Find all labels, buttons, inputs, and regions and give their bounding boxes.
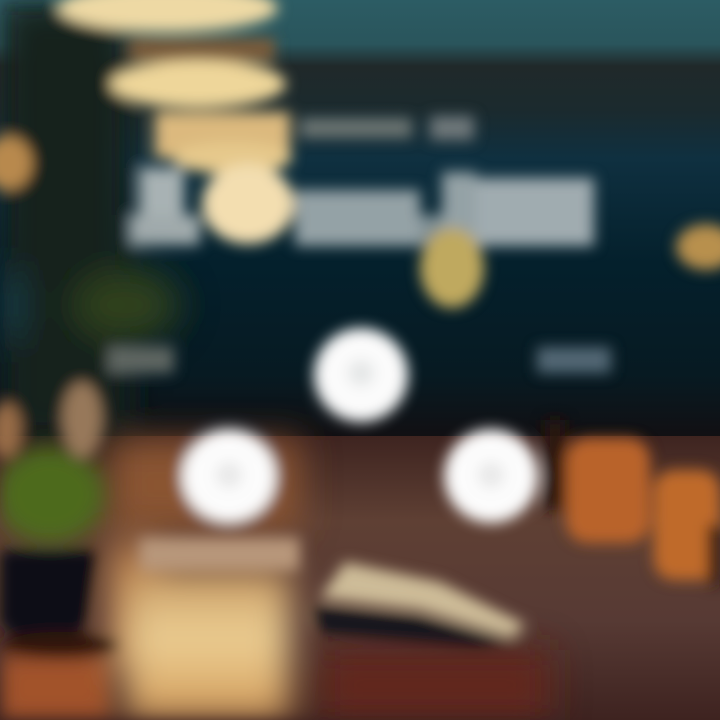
orange chairs — [545, 420, 720, 585]
potted plant foliage — [0, 382, 105, 543]
title heading: small line — [300, 116, 474, 140]
background: wooden table — [0, 436, 720, 720]
right wall lamp — [676, 224, 720, 270]
plant pot shadow — [0, 632, 120, 658]
right stat label — [537, 347, 611, 373]
light band on table — [140, 538, 300, 570]
plant pot — [0, 550, 100, 641]
title heading: large line — [130, 168, 594, 246]
dark left wall — [0, 0, 130, 440]
table light reflection — [125, 570, 290, 720]
background: night window — [0, 0, 720, 440]
green plant in window — [70, 267, 180, 343]
blue patch at left edge — [0, 270, 24, 340]
white circle top — [314, 328, 408, 422]
white circle right — [444, 429, 538, 523]
book on table — [310, 562, 525, 648]
title glow from lamp — [202, 164, 294, 244]
table tones — [0, 440, 550, 720]
left wall lamp — [0, 136, 32, 190]
gold medallion — [420, 228, 484, 308]
pendant lamp stack — [58, 0, 292, 174]
left stat label — [108, 347, 174, 373]
white circle left — [182, 429, 276, 523]
